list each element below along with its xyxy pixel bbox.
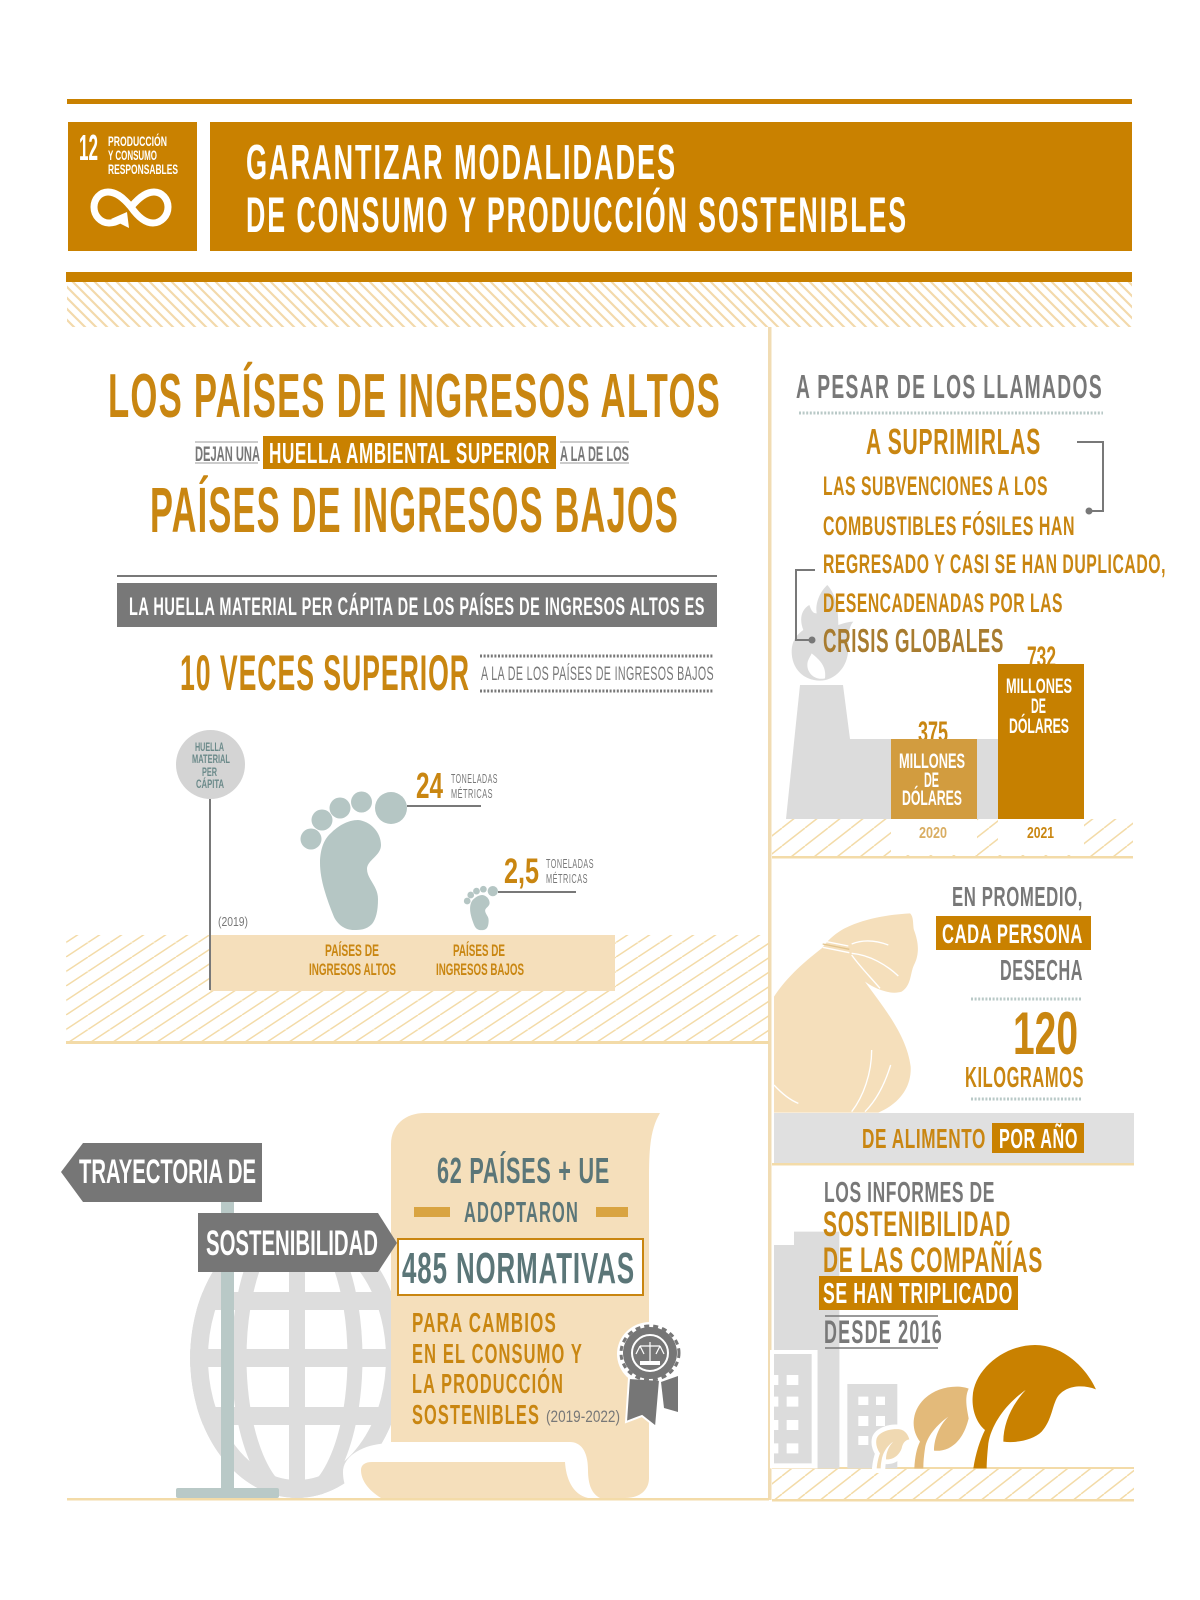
icon: globe [190,1270,391,1498]
scroll [343,1113,660,1498]
text: 62 countries: ADOPTARON [464,1197,579,1229]
hatched ground [772,1467,1134,1502]
headline: DEJAN UNA [195,443,260,466]
label: high income countries [309,941,396,979]
text: each person [936,881,1091,987]
headline: HUELLA AMBIENTAL SUPERIOR [269,438,550,470]
headline [108,362,721,546]
header band [66,99,1132,327]
panel: sustainability path [61,1113,769,1500]
axis marker: (2019) [218,914,248,929]
bar: 2020: DÓLARES [902,786,962,810]
label: low income countries: INGRESOS BAJOS [436,960,524,979]
bar chart: subsidies: 375 [918,716,948,749]
text: company reports: LOS INFORMES DE [824,1177,995,1209]
icon: seal with scales [617,1322,683,1427]
text: company reports: SE HAN TRIPLICADO [823,1278,1013,1310]
headline: PAÍSES DE INGRESOS BAJOS [150,474,679,546]
bar: 2021: DÓLARES [1009,714,1069,738]
label: low income countries: PAÍSES DE [453,941,505,960]
value: 120 kilograms [965,999,1084,1099]
value: 120 kilograms: KILOGRAMOS [965,1062,1084,1094]
label: low income countries [436,941,524,979]
value: 24 tonnes [407,765,498,807]
text: company reports: DESDE 2016 [824,1314,943,1350]
value: 2,5 tonnes: 2,5 [504,852,539,891]
icon: factory with flame [786,585,998,819]
485 regulations box [398,1239,643,1295]
bar chart: subsidies [891,641,1084,842]
heading [796,368,1103,462]
panel: sustainability reports [770,1177,1134,1502]
panel: footprint comparison [66,362,769,1044]
headline: LOS PAÍSES DE INGRESOS ALTOS [108,362,721,431]
icon: city buildings [770,1232,897,1468]
bar: 2021 [998,664,1084,842]
text: for changes: PARA CAMBIOS [412,1307,557,1338]
text: each person: EN PROMEDIO, [952,881,1083,912]
ten times callout: A LA DE LOS PAÍSES DE INGRESOS BAJOS [481,664,714,685]
headline: A LA DE LOS [560,443,629,466]
label: high income countries: PAÍSES DE [325,941,379,960]
axis marker: MATERIAL [192,752,230,766]
panel: food waste [772,881,1134,1166]
ten times callout: 10 VECES SUPERIOR [180,645,470,701]
sign: trayectoria [61,1143,262,1202]
value: 24 tonnes: TONELADAS [451,771,498,786]
value: 2,5 tonnes: TONELADAS [546,856,594,871]
axis marker: CÁPITA [196,776,224,791]
panel: fossil fuel subsidies [772,368,1166,858]
header title: GARANTIZAR MODALIDADES [246,136,677,190]
SDG 12 badge [68,122,197,251]
axis marker: HUELLA [195,740,224,754]
text: for changes: (2019-2022) [546,1407,620,1426]
value: 120 kilograms: 120 [1013,1000,1078,1067]
text: each person: CADA PERSONA [942,919,1083,949]
header title [210,122,1132,251]
label: high income countries: INGRESOS ALTOS [309,960,396,979]
value: 2,5 tonnes [498,852,594,893]
text: each person: DESECHA [1000,955,1083,987]
hatched ground [772,819,1133,858]
signpost [176,1202,279,1498]
icon: small footprint [464,886,498,930]
text block: subsidies: LAS SUBVENCIONES A LOS [823,471,1048,501]
icon: sack [774,913,918,1113]
axis marker: PER [202,765,217,779]
value: 2,5 tonnes: MÉTRICAS [546,871,588,886]
bar: 2020: DE [924,769,939,792]
sign: sostenibilidad: SOSTENIBILIDAD [206,1224,378,1263]
band: food per year: DE ALIMENTO [862,1123,986,1154]
bar: 2021: DE [1031,695,1046,718]
text: company reports [819,1177,1043,1350]
bar: 2020: 2020 [919,825,947,842]
text: 62 countries [414,1150,628,1229]
bar: 2020: MILLONES [899,750,965,773]
icon: three growing leaves [876,1345,1096,1468]
bar chart: subsidies: 732 [1027,641,1056,674]
sign: trayectoria: TRAYECTORIA DE [79,1153,256,1191]
band: food per year [772,1113,1134,1166]
bracket connector [796,570,816,644]
SDG 12 badge: RESPONSABLES [108,161,178,177]
text: for changes: EN EL CONSUMO Y [412,1338,583,1369]
text: for changes [412,1307,620,1430]
grey statement bar: LA HUELLA MATERIAL PER CÁPITA DE LOS PAÍSES DE INGRESOS ALTOS ES [129,592,705,621]
grey statement bar [117,575,717,627]
bracket connector [1077,442,1103,514]
SDG 12 badge: Y CONSUMO [108,147,157,163]
SDG 12 badge: 12 [79,127,98,168]
value: 24 tonnes: 24 [416,765,443,806]
axis marker [176,730,248,990]
485 regulations box: 485 NORMATIVAS [402,1244,635,1293]
text: for changes: LA PRODUCCIÓN [412,1368,564,1399]
sign: sostenibilidad [198,1213,397,1272]
band: food per year: POR AÑO [999,1123,1078,1154]
text: company reports: SOSTENIBILIDAD [823,1205,1011,1244]
text: company reports: DE LAS COMPAÑÍAS [823,1240,1043,1280]
hatched ground [66,935,769,1044]
bar: 2021: MILLONES [1006,675,1072,698]
SDG 12 badge: PRODUCCIÓN [108,132,167,149]
bar: 2021: 2021 [1027,825,1054,842]
text: for changes: SOSTENIBLES [412,1399,540,1430]
heading: A SUPRIMIRLAS [866,421,1041,462]
text block: subsidies: CRISIS GLOBALES [823,622,1004,659]
bar: 2020 [891,739,977,842]
text block: subsidies [823,471,1166,659]
value: 24 tonnes: MÉTRICAS [451,786,493,801]
icon: large footprint [300,792,407,930]
text: 62 countries: 62 PAÍSES + UE [437,1150,610,1191]
